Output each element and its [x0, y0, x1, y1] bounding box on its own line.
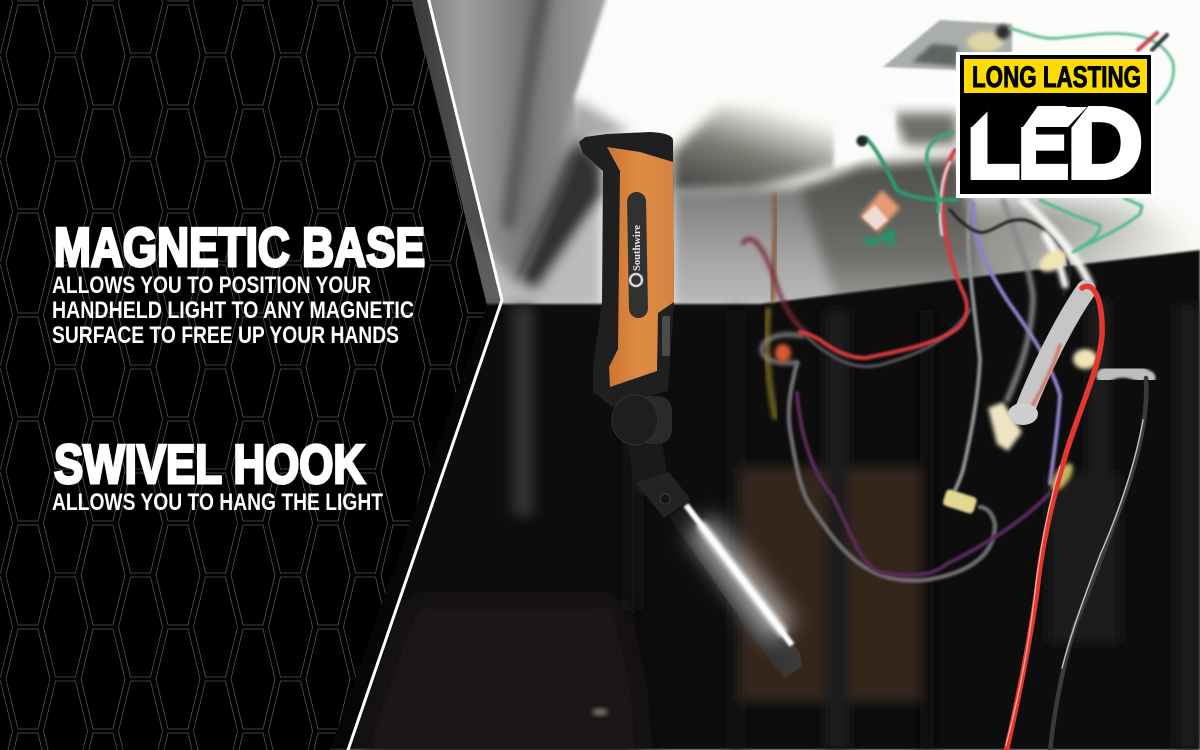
- badge heading: LONG LASTING: [972, 61, 1141, 94]
- heading: magnetic base: MAGNETIC BASE: [54, 216, 425, 278]
- text block: magnetic base description: HANDHELD LIGHT TO ANY MAGNETIC: [52, 297, 414, 324]
- flashlight with magnetic base and swivel hook: [579, 132, 802, 678]
- knockout dot and wire connectors: [775, 136, 1097, 515]
- blurred wires behind the light: [743, 28, 1174, 580]
- text block: magnetic base description: [52, 272, 414, 349]
- flashlight light bar: [669, 503, 802, 678]
- red and black foreground wires: [1006, 286, 1146, 750]
- flashlight brand mark: Southwire: [632, 225, 643, 271]
- green wires: [866, 138, 957, 200]
- white conduit tube and gray cable end: [1008, 290, 1148, 425]
- flashlight swivel knob: [634, 396, 672, 444]
- white chevron line: [347, 0, 502, 750]
- badge LED lettering: E: [1018, 88, 1069, 200]
- black panel with hexagon pattern: [0, 0, 503, 750]
- flashlight body: [579, 132, 674, 407]
- heading: swivel hook: SWIVEL HOOK: [54, 433, 365, 495]
- badge LED lettering: D: [1067, 88, 1143, 200]
- flashlight label pill: [627, 192, 648, 318]
- text block: swivel hook description: ALLOWS YOU TO HANG THE LIGHT: [52, 489, 383, 516]
- flashlight collar: [636, 472, 691, 518]
- text block: magnetic base description: SURFACE TO FREE UP YOUR HANDS: [52, 322, 399, 349]
- badge: long lasting LED: [956, 52, 1154, 200]
- flashlight neck: [628, 443, 668, 500]
- flashlight glow: [700, 525, 782, 632]
- badge LED lettering: L: [967, 88, 1020, 200]
- text block: magnetic base description: ALLOWS YOU TO POSITION YOUR: [52, 272, 371, 299]
- flashlight button: [662, 316, 670, 356]
